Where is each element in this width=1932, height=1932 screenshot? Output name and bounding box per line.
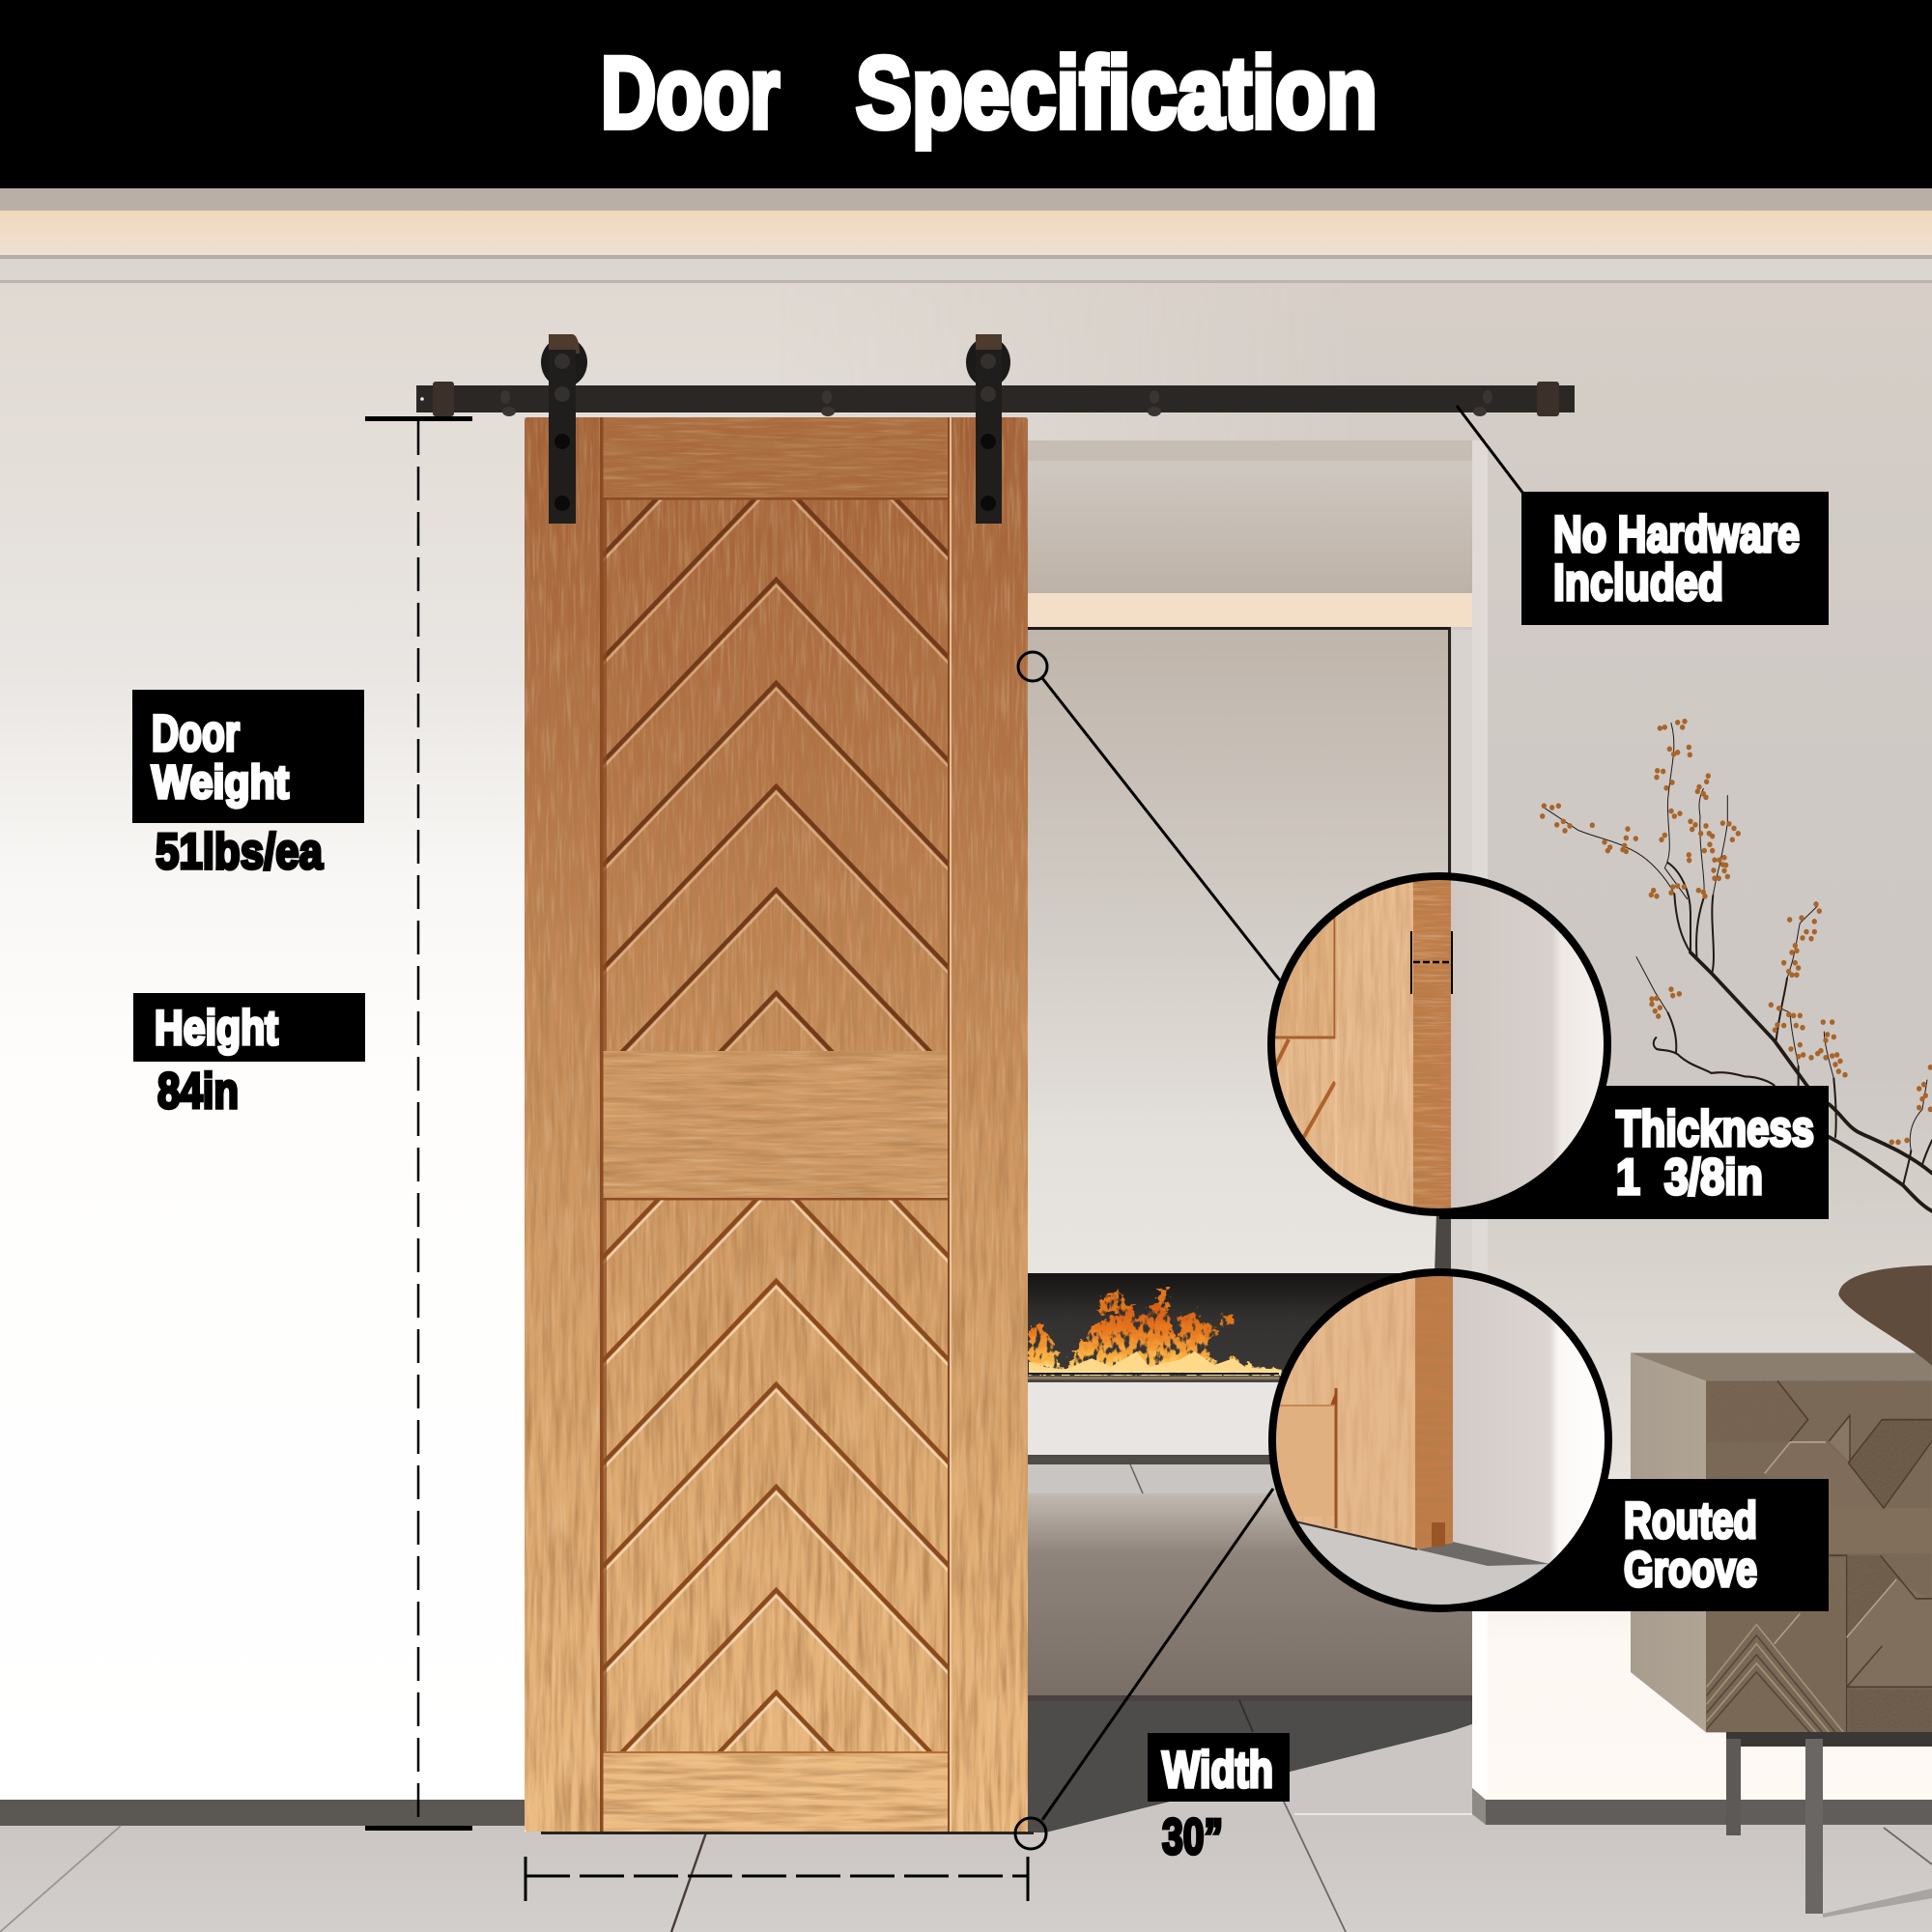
track bar: [416, 385, 1575, 412]
callout: door weight: [132, 690, 364, 880]
title text: Door: [601, 37, 780, 150]
ceiling molding: [0, 188, 1932, 283]
thickness measure mark: [1411, 931, 1452, 994]
upper herringbone panel: [603, 500, 948, 1051]
lower herringbone panel: [603, 1200, 948, 1751]
barn door: [525, 373, 1034, 1885]
sideboard cabinet: [1631, 1265, 1932, 1918]
background wall and room: [0, 283, 1932, 1800]
interior floor and rug: [1028, 1464, 1472, 1833]
right roller hanger: [966, 334, 1010, 524]
callout: door weight: Weight: [152, 757, 289, 809]
sliding track hardware: [416, 334, 1575, 524]
title text: [601, 37, 1378, 150]
callout: width: 30”: [1162, 1809, 1223, 1865]
left roller hanger: [541, 334, 587, 524]
magnifier: routed groove: [1265, 1265, 1623, 1623]
callout: width: Width: [1162, 1742, 1273, 1799]
callout: no hardware included: No Hardware: [1553, 506, 1800, 563]
callout: width: [1015, 1733, 1290, 1865]
callout: routed groove: Routed: [1624, 1492, 1757, 1549]
door rails: [600, 417, 952, 1832]
callout: routed groove: Groove: [1624, 1542, 1757, 1597]
callout: no hardware included: [1457, 406, 1829, 625]
width dimension line: [524, 1857, 1030, 1901]
callout: door weight: Door: [152, 705, 240, 762]
decorative branches with berries: [1543, 722, 1932, 1211]
callout: thickness: [1018, 652, 1829, 1227]
track stoppers: [433, 382, 1559, 416]
flames: [1029, 1289, 1282, 1377]
callout: height: Height: [155, 1001, 278, 1055]
height dimension line: [365, 416, 472, 1831]
callout: routed groove: [1042, 1265, 1829, 1820]
track bolts: [420, 390, 1492, 416]
magnifier: door edge thickness: [1265, 869, 1623, 1227]
doorway opening with interior room: [1028, 440, 1488, 1833]
callout: door weight: 51lbs/ea: [156, 824, 324, 880]
callout: no hardware included: Included: [1553, 554, 1723, 611]
callout: height: 84in: [157, 1064, 239, 1120]
callout: thickness: 1 3/8in: [1616, 1150, 1763, 1206]
fire burner base: [1028, 1373, 1279, 1379]
title bar: [0, 0, 1932, 188]
baseboard and floor: [0, 1700, 1932, 1932]
bowl: [1838, 1265, 1932, 1366]
fireplace: [1028, 1273, 1472, 1464]
cabinet legs: [1726, 1732, 1932, 1918]
callout: thickness: Thickness: [1616, 1101, 1814, 1157]
callout: height: [133, 993, 365, 1120]
title text: Specification: [856, 37, 1378, 150]
